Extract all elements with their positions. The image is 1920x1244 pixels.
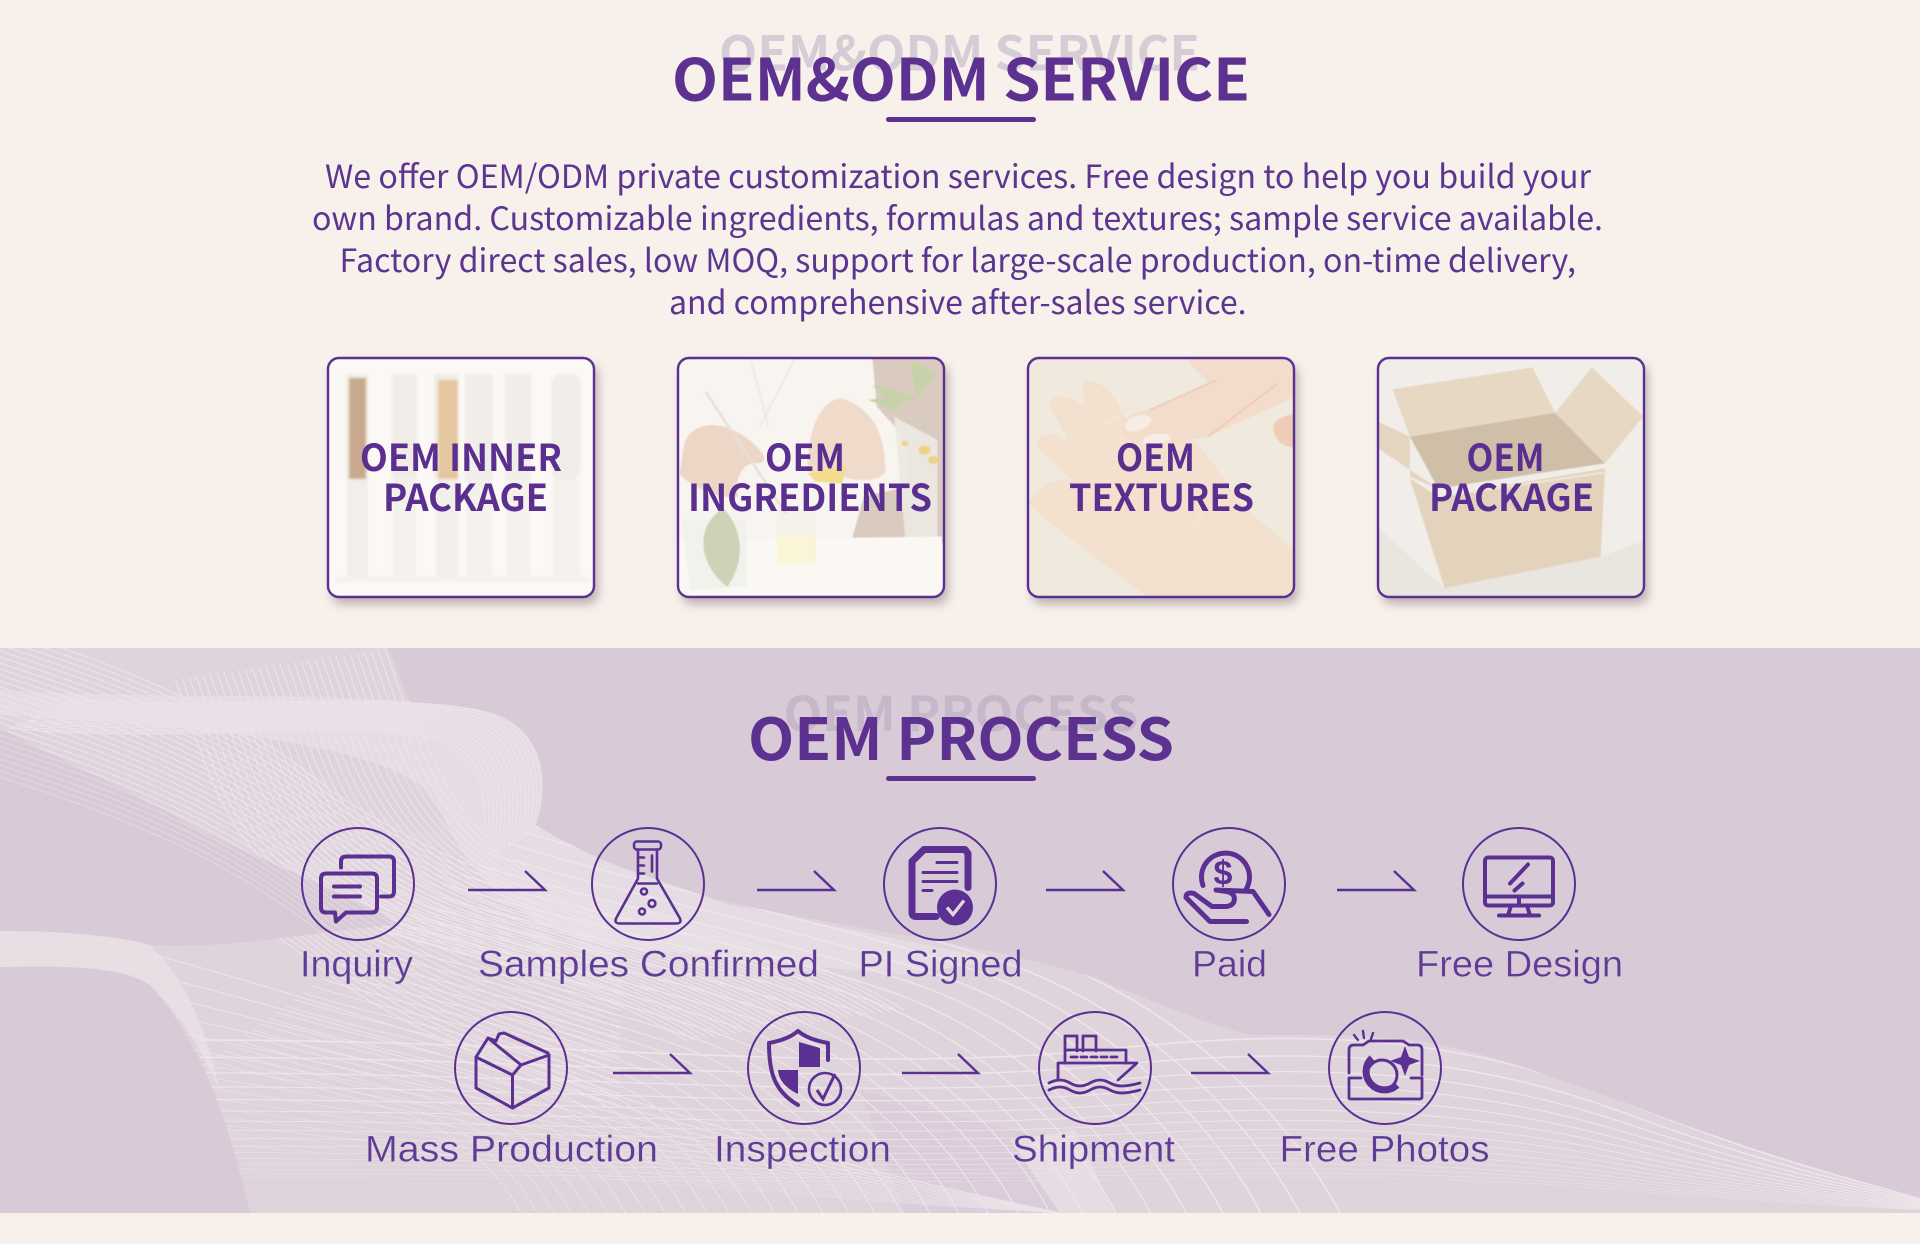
icon: shield check: [769, 1031, 841, 1105]
intro text block: [312, 152, 1603, 324]
step: Samples Confirmed: Samples Confirmed: [478, 944, 819, 984]
icon: signed document: [912, 850, 973, 926]
icon: coin in hand: $: [1214, 854, 1233, 892]
step: Shipment: [1012, 1012, 1176, 1170]
label: OEM INNER PACKAGE: [360, 428, 562, 522]
step: Samples Confirmed: [478, 828, 819, 984]
intro text block: Factory direct sales, low MOQ, support for large-scale production, on-time delivery,: [340, 236, 1576, 282]
label: OEM INGREDIENTS: [688, 428, 932, 522]
step: Inspection: [714, 1012, 891, 1170]
step: Mass Production: [365, 1012, 658, 1170]
step: Inquiry: [300, 828, 414, 984]
label: OEM TEXTURES: TEXTURES: [1069, 468, 1254, 522]
section heading: OEM PROCESS: OEM PROCESS: [784, 675, 1138, 745]
step: Free Design: [1416, 828, 1623, 984]
arrow: [613, 1054, 690, 1073]
intro text block: and comprehensive after-sales service.: [669, 278, 1246, 324]
label: OEM PACKAGE: [1429, 428, 1594, 522]
icon: box: [476, 1033, 549, 1108]
arrow: [1337, 871, 1414, 890]
intro text block: own brand. Customizable ingredients, formulas and textures; sample service available.: [312, 194, 1603, 240]
label: OEM INGREDIENTS: OEM: [765, 428, 845, 482]
label: OEM PACKAGE: OEM: [1466, 428, 1544, 482]
icon: camera: [1349, 1031, 1422, 1099]
arrow: [468, 871, 545, 890]
arrow: [757, 871, 834, 890]
step: Inspection: Inspection: [714, 1128, 891, 1170]
panel: OEM process band background: [0, 627, 1920, 1213]
step: Free Photos: Free Photos: [1280, 1128, 1490, 1170]
arrow: [1191, 1054, 1268, 1073]
section heading: OEM PROCESS: OEM PROCESS: [748, 693, 1174, 777]
step: PI Signed: [858, 828, 1022, 984]
step: Shipment: Shipment: [1012, 1128, 1176, 1170]
icon: flask: [616, 842, 680, 924]
panel: OEM ingredients card: [677, 358, 948, 604]
icon: chat bubbles: [321, 856, 394, 922]
step: Paid: [1173, 828, 1285, 984]
intro text block: We offer OEM/ODM private customization services. Free design to help you build your: [325, 152, 1592, 198]
step: Inquiry: Inquiry: [300, 944, 414, 984]
arrow: [902, 1054, 978, 1073]
icon: ship: [1049, 1036, 1140, 1093]
label: OEM TEXTURES: [1069, 428, 1254, 522]
panel: OEM textures card: [1028, 358, 1298, 604]
step: PI Signed: PI Signed: [858, 944, 1022, 984]
label: OEM INGREDIENTS: INGREDIENTS: [688, 468, 932, 522]
icon: monitor: [1485, 858, 1553, 916]
section heading: OEM&ODM SERVICE: OEM&ODM SERVICE: [672, 34, 1250, 118]
label: OEM PACKAGE: PACKAGE: [1429, 468, 1594, 522]
icon: coin in hand: [1186, 853, 1269, 922]
step: Mass Production: Mass Production: [365, 1128, 658, 1170]
section heading: OEM&ODM SERVICE: OEM&ODM SERVICE: [719, 15, 1200, 85]
label: OEM INNER PACKAGE: OEM INNER: [360, 428, 562, 482]
step: Paid: Paid: [1192, 944, 1267, 984]
step: Free Photos: [1280, 1012, 1490, 1170]
panel: OEM inner package card: [328, 358, 598, 604]
label: OEM TEXTURES: OEM: [1116, 428, 1195, 482]
step: Free Design: Free Design: [1416, 944, 1623, 984]
panel: OEM package card: [1377, 358, 1648, 604]
label: OEM INNER PACKAGE: PACKAGE: [383, 468, 548, 522]
arrow: [1046, 871, 1123, 890]
